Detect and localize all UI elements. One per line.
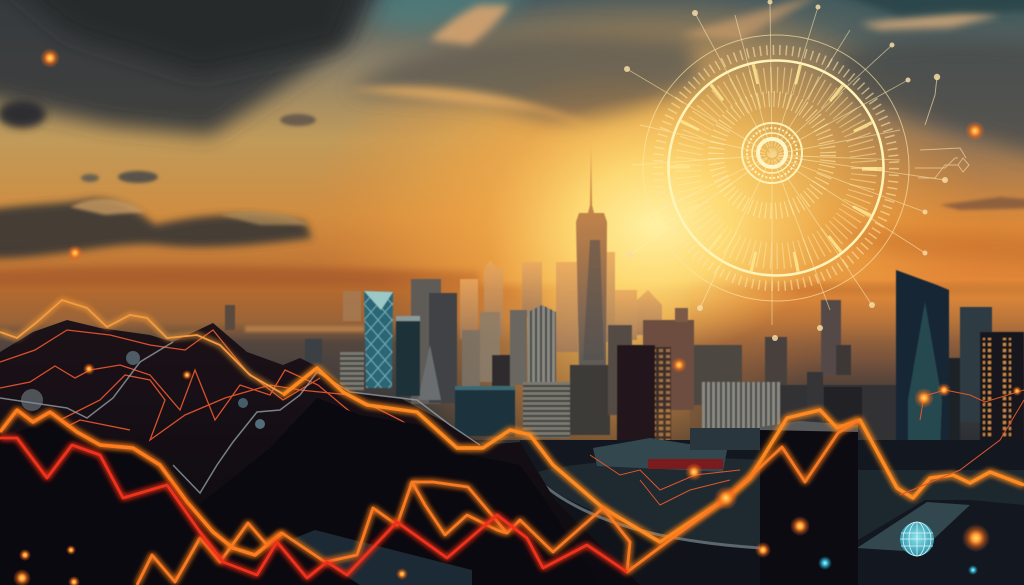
icon: globe	[900, 522, 934, 556]
ring: middle ticks	[716, 99, 828, 211]
chart line: thin red network in right city	[590, 390, 1024, 505]
chart line: main orange trend	[283, 368, 1024, 542]
dark blue tower	[396, 316, 420, 396]
core concentric circles	[742, 123, 802, 183]
dark foreground tower cluster	[617, 270, 1024, 450]
lower dark silhouette	[0, 398, 600, 585]
chart line: red	[0, 438, 627, 578]
thin red chart lines inside silhouette	[0, 330, 450, 470]
spoke end dots	[624, 0, 948, 341]
ring: outer ticks	[658, 50, 894, 286]
circuit traces	[915, 77, 969, 178]
sky background	[0, 0, 1024, 290]
dark block in lower chart	[290, 530, 472, 585]
teal lattice tower	[364, 291, 393, 388]
chart line: jagged orange	[137, 420, 858, 585]
ring: main	[668, 60, 884, 276]
spokes	[627, 2, 945, 325]
hazy far towers	[343, 252, 662, 388]
pale office blocks	[455, 382, 780, 440]
grey-white chart line	[0, 342, 480, 493]
ring: fine ticks	[688, 80, 864, 256]
buildings layer softened	[225, 145, 1024, 450]
circular tech sun diagram	[624, 0, 969, 341]
chart line: thick left orange trend	[0, 410, 282, 555]
distant city band	[0, 70, 1024, 488]
dark foreground block	[760, 421, 858, 585]
dark mountain data silhouette, upper	[0, 320, 640, 585]
mid-ground towers	[225, 279, 992, 448]
clouds	[0, 0, 1024, 295]
chart line: pale orange upper	[0, 300, 285, 395]
central spire tower	[576, 145, 607, 365]
foreground stadium and rooftops	[520, 428, 1024, 585]
ring: outer faint	[643, 35, 909, 301]
ring: wedge ticks	[680, 72, 872, 264]
small circular data icons	[21, 351, 265, 429]
